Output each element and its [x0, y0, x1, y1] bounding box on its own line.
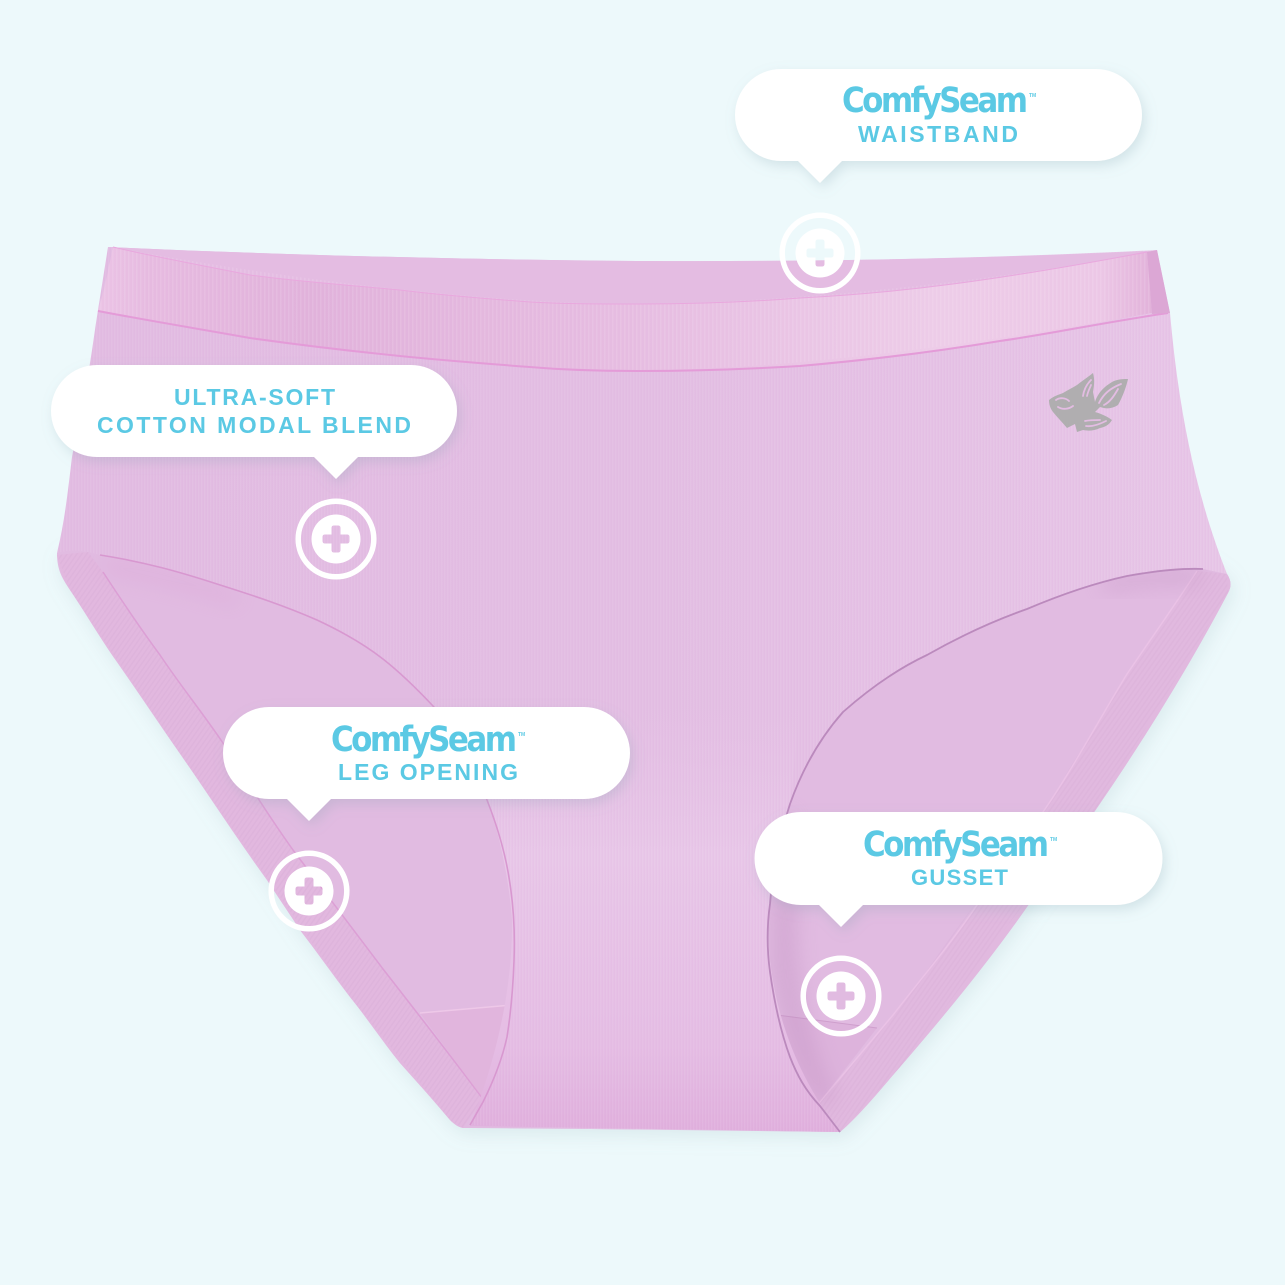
- marker: leg opening: [271, 853, 347, 929]
- trademark: TM: [1029, 93, 1036, 99]
- plus disc: [816, 972, 866, 1020]
- binding strip left: [57, 552, 483, 1128]
- binding seam right: [818, 571, 1197, 1104]
- waistband lower stitch: [98, 311, 1168, 371]
- leg shadow right: [771, 804, 835, 1110]
- label line one: ULTRA-SOFT: [174, 384, 335, 410]
- bubble: [223, 707, 630, 821]
- bubble: [51, 365, 457, 479]
- callout: ultra-soft fabric: [51, 365, 457, 479]
- gusset panel right: [777, 1015, 877, 1104]
- label: WAISTBAND: [858, 121, 1018, 147]
- back waistband: [108, 247, 1150, 304]
- gusset seam left: [420, 1005, 512, 1013]
- gusset panel left: [420, 1005, 512, 1099]
- plus disc: [284, 866, 334, 916]
- leg edge left: [100, 555, 514, 1125]
- ring: [782, 215, 858, 291]
- logo: ComfySeam: [331, 718, 517, 759]
- leg edge right: [768, 569, 1203, 1132]
- waistband knit texture: [98, 247, 1152, 370]
- ring: [271, 853, 347, 929]
- label: LEG OPENING: [338, 759, 518, 785]
- plus disc: [796, 228, 844, 278]
- ring: [803, 958, 879, 1034]
- binding seam left: [103, 572, 483, 1099]
- garment back and binding: [57, 441, 1231, 1132]
- waistband upper stitch: [113, 247, 1147, 304]
- marker: waistband: [782, 215, 858, 291]
- waistband end fold: [1147, 250, 1170, 314]
- logo: ComfySeam: [842, 79, 1028, 120]
- elastic waistband: [98, 247, 1152, 370]
- front fabric rib texture: [57, 247, 1227, 1132]
- trademark: TM: [518, 732, 525, 738]
- marker: fabric: [298, 501, 374, 577]
- garment front: [57, 247, 1227, 1132]
- bubble: [755, 812, 1162, 927]
- underwear garment: [57, 247, 1231, 1132]
- callout: ComfySeam leg opening: [223, 707, 630, 821]
- gusset centre tone: [433, 706, 840, 1132]
- fish fin markings: [1056, 380, 1121, 426]
- marker: gusset: [803, 958, 879, 1034]
- trademark: TM: [1050, 837, 1057, 843]
- bubble: [735, 69, 1142, 183]
- label line two: COTTON MODAL BLEND: [97, 412, 411, 438]
- logo: ComfySeam: [863, 823, 1049, 864]
- icon: goldfish logo: [1049, 373, 1128, 432]
- callout: ComfySeam gusset: [755, 812, 1162, 927]
- leg shadow left: [100, 558, 240, 605]
- plus disc: [312, 514, 360, 564]
- ring: [298, 501, 374, 577]
- callout: ComfySeam waistband: [735, 69, 1142, 183]
- binding strip right: [818, 571, 1231, 1132]
- leg corner shadow right: [1100, 569, 1205, 592]
- binding twill texture: [57, 552, 1228, 1132]
- label: GUSSET: [911, 865, 1009, 890]
- gusset seam right: [777, 1015, 877, 1028]
